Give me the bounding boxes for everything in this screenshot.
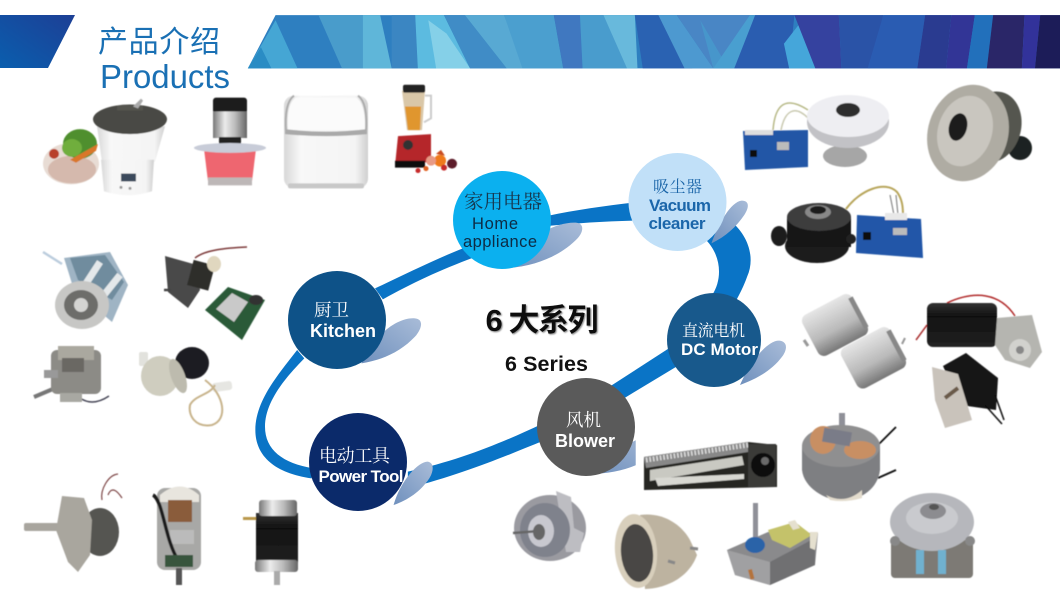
loop ring connecting the six series <box>255 203 751 488</box>
node: power tool <box>309 413 407 511</box>
photo: black stepper motor <box>932 353 1004 428</box>
photo: shaded pole motor, copper coils <box>802 413 896 501</box>
node: home appliance <box>453 171 551 269</box>
node: blower: Blower <box>555 431 615 451</box>
node: home appliance: 家用电器 <box>464 191 542 213</box>
node: vacuum cleaner <box>628 153 726 251</box>
center heading: 6 Series <box>505 352 588 376</box>
node: home appliance: Home <box>472 215 518 233</box>
node: kitchen <box>288 271 386 369</box>
header: left blue parallelogram <box>0 15 75 68</box>
title: 产品介绍 <box>98 26 220 59</box>
photo: water pump motor <box>139 347 233 425</box>
photo: blender with fruit <box>395 85 457 173</box>
photo: universal motor with shaft <box>34 346 109 402</box>
title <box>98 26 230 95</box>
node: DC motor <box>667 293 761 387</box>
node: blower: 风机 <box>566 410 601 430</box>
node: vacuum cleaner: Vacuum <box>649 196 711 215</box>
photo: black gear motor <box>916 295 1042 368</box>
photo: cross-flow blower <box>644 442 777 490</box>
header: faceted blue banner <box>248 15 1060 68</box>
photo: food chopper <box>194 98 266 185</box>
photo: silver and dark motor <box>915 74 1032 192</box>
node: DC motor: 直流电机 <box>682 322 745 340</box>
node: power tool: Power Tool <box>318 467 404 486</box>
photo: brushed universal motor <box>153 486 201 585</box>
photo: white box appliance <box>284 96 368 188</box>
title: Products <box>100 58 230 95</box>
node: DC motor: DC Motor <box>681 340 758 359</box>
photo: aluminium fan motor <box>513 491 586 561</box>
photo: long shaft motor <box>24 474 122 572</box>
photo: beige cylinder motor <box>612 512 698 590</box>
center heading <box>486 303 598 376</box>
node: kitchen: 厨卫 <box>314 300 349 320</box>
photo: black cylinder motor <box>243 500 298 585</box>
photo: shaded pole motor, green coil <box>727 503 818 585</box>
node: blower <box>537 378 635 476</box>
node: home appliance: appliance <box>463 233 537 251</box>
node shadows <box>361 201 786 505</box>
node: vacuum cleaner: cleaner <box>648 214 706 233</box>
photo: stepper motor and green board <box>164 247 265 340</box>
photo: aluminium refrigerator fan motor <box>890 493 975 578</box>
photo: chrome motor <box>43 252 128 329</box>
photo: silver DC motors <box>799 291 909 391</box>
photo: white vacuum motor and board <box>743 95 889 170</box>
photo: salad spinner <box>43 99 167 195</box>
node: power tool: 电动工具 <box>319 446 391 466</box>
photo: black blower motor and board <box>771 187 923 263</box>
center heading: 6 大系列 <box>486 303 598 338</box>
node: kitchen: Kitchen <box>310 321 376 341</box>
node: vacuum cleaner: 吸尘器 <box>653 178 702 196</box>
